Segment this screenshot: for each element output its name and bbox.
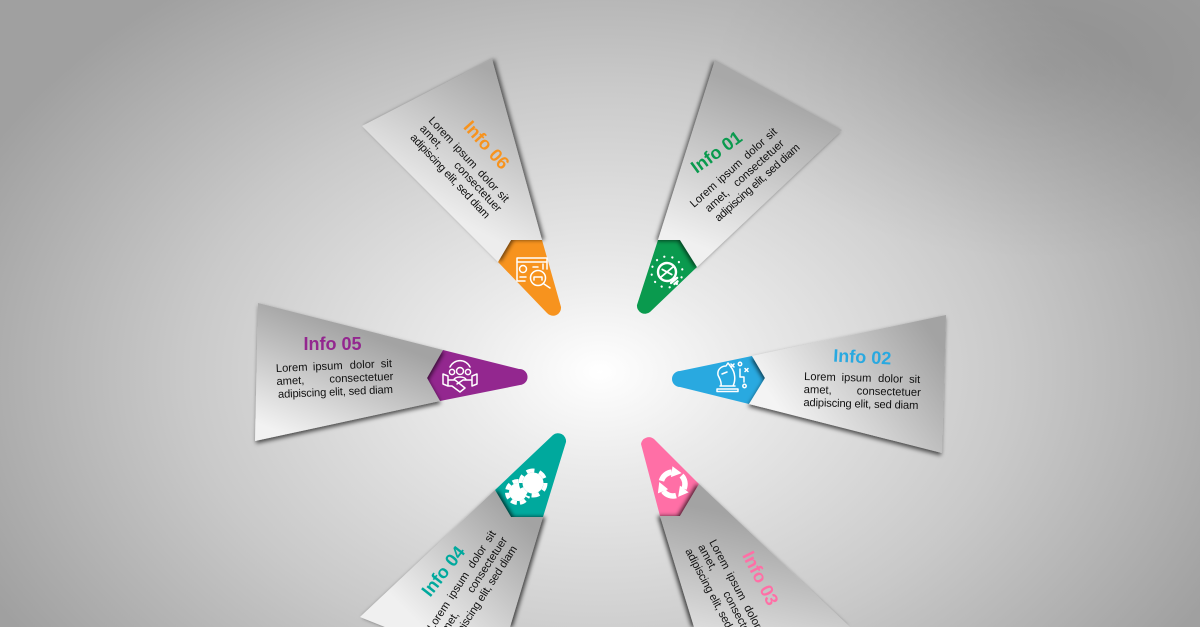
icon: gear bulb [645,250,689,294]
heading: Info 04 [418,542,469,600]
heading: Info 01 [687,127,746,177]
heading: Info 02 [833,346,892,369]
body text: consectetuer [731,138,787,189]
card [362,59,542,262]
body text: consectetuer [451,160,504,215]
tab: green [637,240,697,314]
body text: sit [909,374,921,386]
panel: Info 03 [641,437,850,627]
body text: sit [483,528,499,545]
body text: Lorem [688,180,720,210]
panel: Info 06 [362,59,561,316]
body text: ipsum [450,141,479,171]
body text: dolor [350,359,375,372]
tab: purple [423,350,528,401]
body text: consectetuer [329,371,394,386]
body text: amet, [804,384,832,397]
card [660,484,850,627]
body text [803,371,922,412]
icon: team handshake [443,361,477,392]
body text: Lorem [426,115,456,146]
panel: Info 01 [637,60,842,314]
body text [688,122,803,230]
body text: ipsum [724,570,748,602]
tab: pink [641,437,699,519]
body text [276,358,394,401]
body text: sit [381,358,393,370]
body text: Lorem [276,362,308,375]
card [749,315,946,453]
body text: adipiscing elit, sed diam [408,132,492,221]
panel: Info 05 [255,303,528,441]
body text: sit [763,125,780,142]
tab: blue [672,356,770,404]
body text [408,115,513,224]
body text: dolor [878,373,903,386]
body text: dolor [466,543,490,571]
body text [425,528,521,627]
body text: ipsum [715,157,745,186]
body text: dolor [475,168,501,194]
tab: teal [495,433,566,520]
card [255,303,443,441]
card [658,60,842,267]
body text: consectetuer [857,385,921,399]
icon: puzzle gears [507,469,547,503]
body text: amet, [695,543,719,573]
body text: dolor [741,136,768,162]
body text: Lorem [706,538,732,571]
body text: amet, [417,123,445,152]
body text: amet, [703,187,732,215]
tab: orange [498,238,561,316]
body text: adipiscing elit, sed diam [278,384,393,401]
body text [682,535,772,627]
body text: sit [495,189,512,206]
icon: chess knight [717,362,748,392]
body text: adipiscing elit, sed diam [803,397,919,412]
body text: ipsum [313,360,343,373]
body text: ipsum [841,372,872,385]
card [360,490,543,627]
body text: Lorem [804,371,836,384]
panel: Info 04 [360,433,566,627]
body text: adipiscing elit, sed diam [713,142,803,224]
heading: Info 05 [303,334,362,354]
body text: consectetuer [465,535,510,595]
icon: analytics magnifier [517,258,550,288]
body text: ipsum [446,570,472,602]
heading: Info 06 [460,117,513,173]
icon: cycle arrows [652,464,696,506]
body text: amet, [276,375,305,388]
heading: Info 03 [738,548,782,609]
panel: Info 02 [672,315,946,453]
